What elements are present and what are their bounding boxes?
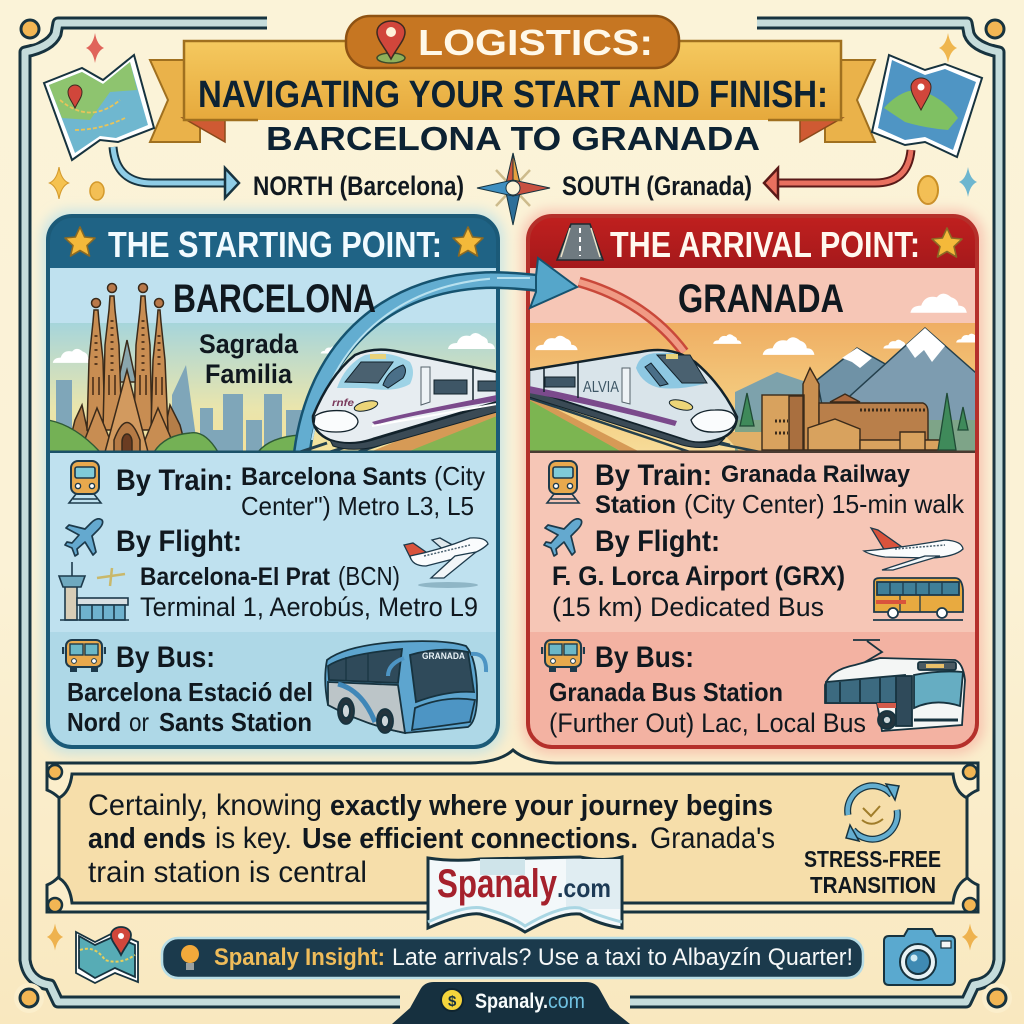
arc arrow band xyxy=(302,280,500,452)
insight bar: Spanaly Insight: xyxy=(214,944,385,971)
icon: map pin xyxy=(377,21,405,63)
row: bus: By Bus: xyxy=(595,641,694,674)
scene: Barcelona skyline and train xyxy=(48,278,500,453)
icon: left train: rnfe xyxy=(332,398,354,409)
decorative sparkles and coins xyxy=(49,33,977,204)
header bar: arrival point xyxy=(528,216,977,268)
icon: light bulb xyxy=(181,945,199,970)
direction label south: SOUTH (Granada) xyxy=(562,171,752,201)
row: by train: (City xyxy=(434,461,485,491)
row: flight xyxy=(544,519,963,622)
title banner ribbon xyxy=(150,41,875,154)
descending red swoosh xyxy=(579,282,684,352)
row: train xyxy=(547,459,965,519)
row: bus: (Further Out) Lac, Local Bus xyxy=(549,708,866,738)
icon: trolleybus xyxy=(825,640,965,731)
mountains xyxy=(735,328,976,430)
icon: left train xyxy=(313,350,497,449)
row: by train xyxy=(69,461,485,521)
label: stress-free transition: STRESS-FREE xyxy=(804,846,941,872)
row: train: (City Center) 15-min walk xyxy=(684,489,965,519)
label: stress-free transition: TRANSITION xyxy=(810,872,936,898)
summary text: exactly where your journey begins xyxy=(330,790,773,822)
header bar: starting point: THE STARTING POINT: xyxy=(108,224,442,265)
icon: cycle arrows xyxy=(846,784,899,841)
logo: Spanaly open book xyxy=(428,857,622,932)
footer tab: Spanaly.com: Spanaly. xyxy=(475,990,548,1013)
trees xyxy=(740,393,968,450)
row: by flight xyxy=(59,519,488,622)
panel: starting point xyxy=(48,216,500,747)
panel glows xyxy=(42,210,984,754)
logistics pill heading xyxy=(346,16,679,68)
icon: coin bulb xyxy=(441,989,463,1011)
summary text: Use efficient connections. xyxy=(302,823,638,855)
arrow: blue from map to north xyxy=(113,147,239,198)
label: stress-free transition xyxy=(804,846,941,898)
row: by bus: Barcelona Estació del xyxy=(67,677,313,707)
arrow head: journey arrow crossing panels xyxy=(490,258,577,308)
left map icon xyxy=(44,55,154,160)
header bar: starting point xyxy=(48,216,498,268)
summary text: train station is central xyxy=(88,856,367,889)
alhambra xyxy=(762,368,945,450)
row: train: By Train: xyxy=(595,459,712,492)
arrow: red from map to south xyxy=(764,150,911,198)
icon: airliner xyxy=(864,528,963,570)
row: by bus: By Bus: xyxy=(116,641,215,674)
header bar: arrival point: THE ARRIVAL POINT: xyxy=(610,224,920,265)
row: flight: By Flight: xyxy=(595,525,720,558)
sparkles near tip bar xyxy=(47,924,978,950)
panel: summary plaque xyxy=(47,750,978,912)
icon: airport terminal xyxy=(59,562,129,620)
row: flight: F. G. Lorca Airport (GRX) xyxy=(552,561,845,591)
direction label north: NORTH (Barcelona) xyxy=(253,171,464,201)
scene: Granada landscape and train xyxy=(529,282,982,453)
icon: Sagrada Familia xyxy=(67,284,187,452)
icon: coin bulb: $ xyxy=(448,993,457,1010)
summary text: and ends xyxy=(88,823,206,855)
ground and track xyxy=(530,400,619,450)
title line 1: NAVIGATING YOUR START AND FINISH: xyxy=(198,74,828,116)
panel: arrival point xyxy=(528,216,982,747)
GRANADA city name: GRANADA xyxy=(678,277,844,321)
logo: Spanaly open book: Spanaly xyxy=(437,862,558,906)
logistics pill heading: LOGISTICS: xyxy=(418,22,653,63)
Sagrada Familia label: Sagrada xyxy=(199,329,299,359)
insight bar: Late arrivals? Use a taxi to Albayzín Quarter! xyxy=(392,944,853,971)
icon: camera xyxy=(884,929,955,985)
summary text: Granada's xyxy=(650,822,775,855)
row: by flight: Barcelona-El Prat xyxy=(140,563,331,591)
summary text: is key. xyxy=(215,822,292,855)
icon: right train: ALVIA xyxy=(583,379,619,396)
Sagrada Familia label xyxy=(199,329,299,389)
Sagrada Familia label: Familia xyxy=(205,359,293,389)
icon: folded map bottom xyxy=(76,927,138,983)
summary text: Certainly, knowing xyxy=(88,789,322,822)
row: by bus: Sants Station xyxy=(159,707,312,737)
ground and track xyxy=(411,416,496,450)
row: train: Granada Railway xyxy=(721,461,911,488)
icon: coach xyxy=(325,641,486,733)
logo: Spanaly open book: .com xyxy=(557,873,611,903)
icon: yellow bus xyxy=(873,578,963,620)
row: by train: Center") Metro L3, L5 xyxy=(241,491,474,521)
row: by flight: By Flight: xyxy=(116,525,242,558)
icon: road xyxy=(557,224,603,260)
insight bar xyxy=(162,938,863,978)
footer tab: Spanaly.com xyxy=(392,982,630,1024)
row: by bus xyxy=(63,640,486,737)
footer tab: Spanaly.com: com xyxy=(548,990,585,1013)
row: by flight: Terminal 1, Aerobús, Metro L9 xyxy=(140,592,478,622)
subtitle: BARCELONA TO GRANADA xyxy=(266,120,760,157)
row: by bus: Nord xyxy=(67,707,121,737)
row: flight: (15 km) Dedicated Bus xyxy=(552,592,824,622)
icon: right train xyxy=(529,350,737,448)
icon: plane illustration xyxy=(404,538,488,588)
row: by train: Barcelona Sants xyxy=(241,463,427,491)
summary text xyxy=(88,789,775,889)
row: train: Station xyxy=(595,491,676,519)
bushes xyxy=(48,420,302,452)
row: by bus: or xyxy=(129,707,149,737)
right map icon xyxy=(872,55,982,157)
row: bus xyxy=(542,640,965,738)
icon: coach: GRANADA xyxy=(422,651,465,661)
row: by train: By Train: xyxy=(116,464,233,497)
BARCELONA city name: BARCELONA xyxy=(173,277,376,321)
row: bus: Granada Bus Station xyxy=(549,677,783,707)
row: by flight: (BCN) xyxy=(338,561,400,591)
icon: compass xyxy=(477,153,550,225)
